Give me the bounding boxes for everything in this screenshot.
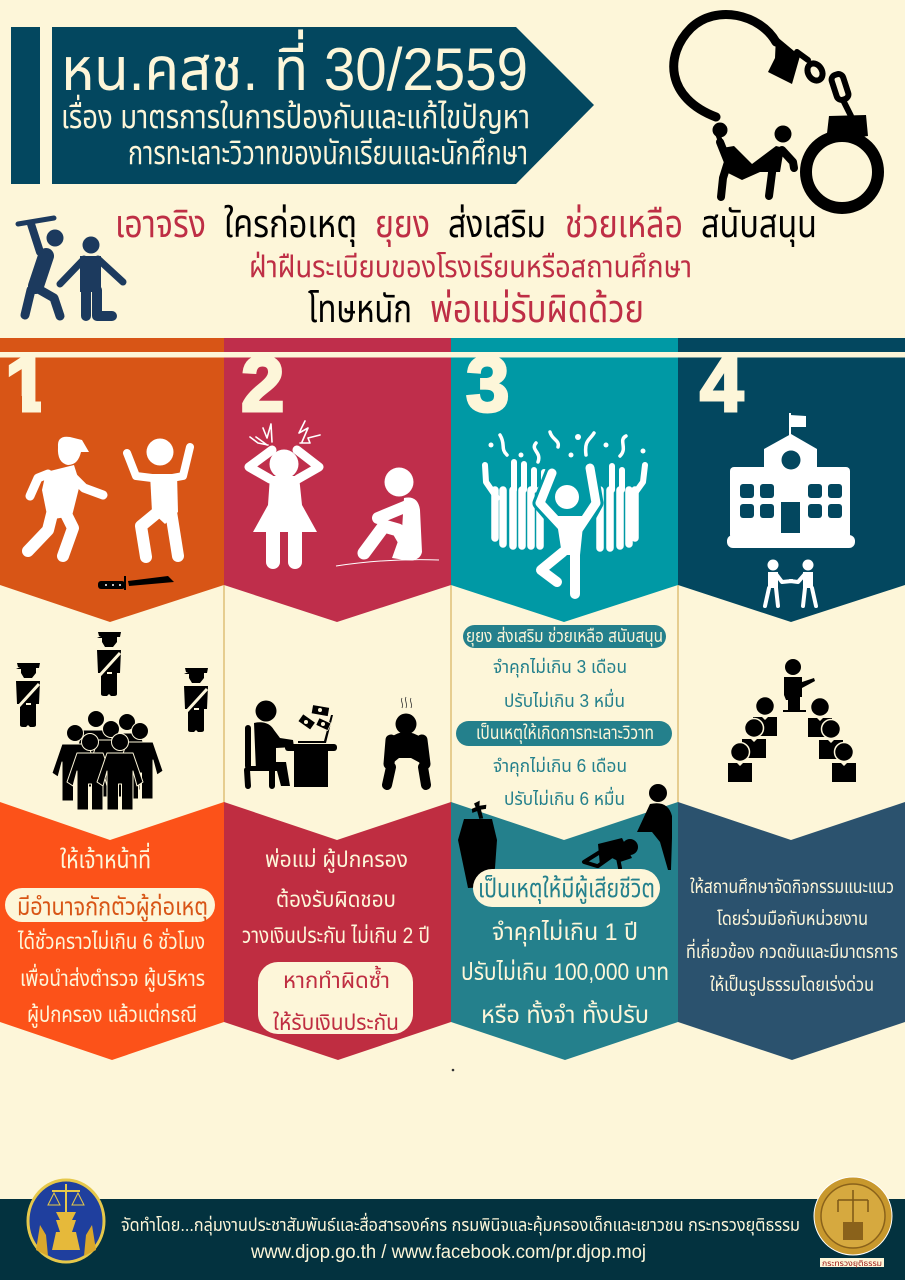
- headline line 1: [115, 204, 817, 247]
- icon: coffin: [458, 800, 497, 888]
- icon: police officers: [16, 632, 208, 732]
- text: parent responsibility: [242, 847, 430, 948]
- icon: two men fighting: [28, 437, 190, 557]
- headline line 1: ช่วยเหลือ: [565, 204, 683, 246]
- text: death penalties: ปรับไม่เกิน 100,000 บาท: [461, 958, 669, 986]
- number 2: 2: [241, 340, 284, 428]
- text: school guidance: ให้เป็นรูปธรรมโดยเร่งด่วน: [710, 973, 874, 997]
- panel 3 bottom: [451, 784, 678, 1060]
- text: parent responsibility: วางเงินประกัน ไม่เกิน 2 ปี: [242, 923, 430, 948]
- title subject line 1: เรื่อง มาตรการในการป้องกันและแก้ไขปัญหา: [61, 94, 530, 135]
- text: death penalties: จำคุกไม่เกิน 1 ปี: [492, 918, 638, 947]
- text: death penalties: หรือ ทั้งจำ ทั้งปรับ: [481, 999, 649, 1029]
- logo: ministry of justice seal: กระทรวงยุติธรรม: [822, 1259, 882, 1268]
- panel 3 top: [451, 338, 678, 622]
- fine text 60000: ปรับไม่เกิน 6 หมื่น: [504, 786, 625, 809]
- headline line 1: เอาจริง: [115, 204, 206, 246]
- headline line 3: [308, 289, 644, 331]
- callout: repeat offence: [258, 962, 413, 1035]
- text: death penalties: [461, 918, 669, 1029]
- text: parent responsibility: พ่อแม่ ผู้ปกครอง: [265, 847, 408, 873]
- icon: cheering crowd: [485, 432, 646, 594]
- panel 4 top: [678, 338, 905, 622]
- icon: teacher and students: [728, 659, 856, 782]
- icon: stressed girl: [249, 421, 320, 562]
- panel 1 top: [0, 338, 224, 622]
- icon: person over collapsed victim: [584, 784, 672, 870]
- text: parent responsibility: ต้องรับผิดชอบ: [276, 887, 396, 912]
- panel 2 bottom: [224, 802, 451, 1060]
- icon: sad sitting figure: [336, 468, 439, 566]
- panel 4 bottom: [678, 802, 905, 1060]
- footer: [0, 1177, 905, 1280]
- number 4: 4: [700, 340, 743, 428]
- footer links: www.djop.go.th / www.facebook.com/pr.djop.moj: [250, 1242, 646, 1263]
- footer credit: จัดทำโดย...กลุ่มงานประชาสัมพันธ์และสื่อสารองค์กร กรมพินิจและคุ้มครองเด็กและเยาวชน กระทรวงยุติธรรม: [121, 1212, 800, 1236]
- title heading: หน.คสช. ที่ 30/2559: [61, 29, 528, 103]
- headline line 3: พ่อแม่รับผิดด้วย: [430, 289, 644, 331]
- headline line 2: ฝ่าฝืนระเบียบของโรงเรียนหรือสถานศึกษา: [249, 251, 692, 284]
- pill: cause of quarrel: เป็นเหตุให้เกิดการทะเลาะวิวาท: [476, 721, 654, 744]
- column dividers and upper panels: [224, 580, 678, 805]
- logo: ministry of justice seal: [814, 1177, 892, 1268]
- icon: handcuffs with fighters: [674, 14, 878, 208]
- pill: cause of death: [473, 869, 660, 907]
- headline line 3: โทษหนัก: [308, 289, 412, 331]
- number 1: 1: [5, 340, 48, 428]
- headline line 1: สนับสนุน: [701, 204, 817, 247]
- pill: incite and support: ยุยง ส่งเสริม ช่วยเหลือ สนับสนุน: [466, 626, 663, 647]
- panel 2 top: [224, 338, 451, 622]
- text: authority details: เพื่อนำส่งตำรวจ ผู้บริหาร: [20, 963, 205, 992]
- callout: repeat offence: หากทำผิดซ้ำ: [283, 965, 390, 993]
- title subject line 2: การทะเลาะวิวาทของนักเรียนและนักศึกษา: [128, 134, 528, 171]
- logo: department seal: [28, 1180, 104, 1262]
- number 3: 3: [466, 340, 509, 428]
- callout: repeat offence: ให้รับเงินประกัน: [273, 1010, 399, 1035]
- icon: attacker with club: [18, 218, 123, 316]
- icon: knife: [98, 576, 174, 590]
- text: authority details: ได้ชั่วคราวไม่เกิน 6 ชั่วโมง: [17, 927, 205, 954]
- headline line 1: ส่งเสริม: [448, 204, 546, 246]
- pill: cause of death: เป็นเหตุให้มีผู้เสียชีวิต: [478, 873, 655, 904]
- title banner: [11, 27, 594, 184]
- text: school guidance: [686, 875, 898, 997]
- text: authority line 1: ให้เจ้าหน้าที่: [60, 842, 151, 874]
- stray dot: [452, 1069, 454, 1071]
- panel 1 bottom: [0, 802, 224, 1060]
- headline line 1: ใครก่อเหตุ: [224, 204, 357, 247]
- text: authority details: [17, 927, 205, 1028]
- fine text 30000: ปรับไม่เกิน 3 หมื่น: [504, 688, 625, 711]
- icon: school: [727, 413, 855, 548]
- penalty text 3 months: จำคุกไม่เกิน 3 เดือน: [493, 657, 627, 678]
- icon: handshake: [765, 560, 816, 606]
- icon: exhausted figure: [387, 697, 426, 785]
- penalty text 6 months: จำคุกไม่เกิน 6 เดือน: [493, 756, 627, 777]
- text: authority details: ผู้ปกครอง แล้วแต่กรณี: [27, 1002, 197, 1028]
- headline line 1: ยุยง: [375, 204, 430, 247]
- header rule: [0, 352, 905, 358]
- pill: power to detain: มีอำนาจกักตัวผู้ก่อเหตุ: [17, 893, 208, 922]
- text: school guidance: โดยร่วมมือกับหน่วยงาน: [717, 907, 868, 930]
- icon: crowd of students: [52, 710, 163, 810]
- icon: parent paying bail at desk: [247, 700, 337, 787]
